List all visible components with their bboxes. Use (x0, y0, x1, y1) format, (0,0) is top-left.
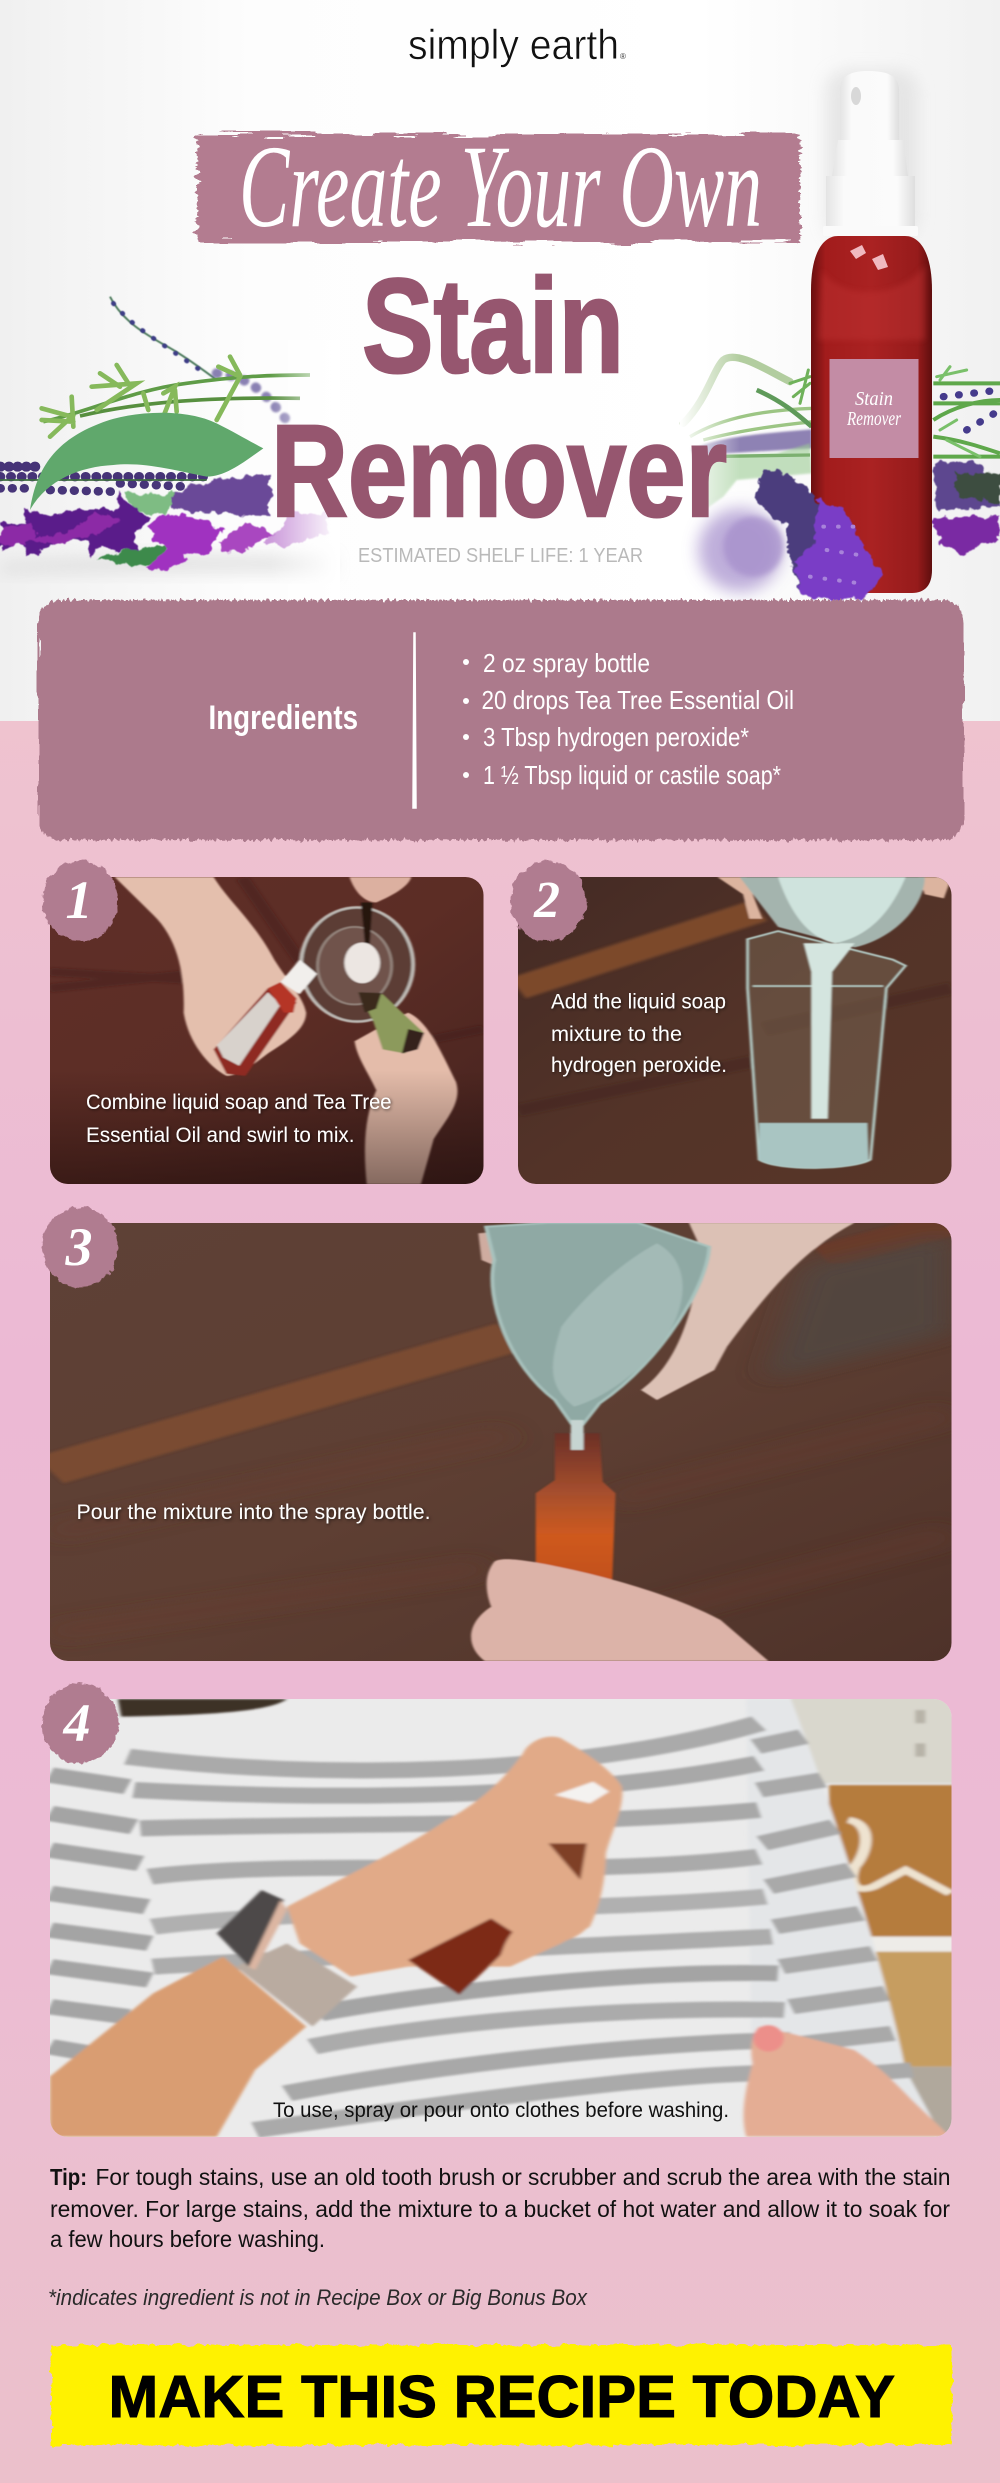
tip text: a few hours before washing. (50, 2226, 325, 2252)
panel: ingredients (38, 600, 964, 840)
hero: right botanical photo (683, 357, 1000, 555)
footnote: *indicates ingredient is not in Recipe Box or Big Bonus Box (48, 2285, 588, 2310)
call to action button: MAKE THIS RECIPE TODAY (108, 2364, 895, 2430)
tip text: For tough stains, use an old tooth brush or scrubber and scrub the area with the stain (96, 2164, 950, 2190)
brush stroke (197, 134, 800, 242)
panel: step 1 (42, 861, 484, 1184)
ingredient list: 1 ½ Tbsp liquid or castile soap* (483, 760, 781, 790)
ingredient list (463, 648, 794, 790)
step 3 photo (50, 1223, 952, 1661)
step 4 badge: 4 (62, 1693, 90, 1753)
step 3 badge: 3 (64, 1217, 92, 1277)
spray bottle (811, 70, 932, 593)
hero: right photo fade (680, 340, 740, 610)
bottle label: Remover (846, 408, 901, 430)
ingredients heading: Ingredients (208, 699, 358, 737)
bottle cap and nozzle (823, 71, 918, 236)
step 2 badge (510, 861, 586, 941)
panel: step 3 (42, 1207, 952, 1661)
step 1 badge (42, 861, 118, 941)
logo: ® (620, 52, 626, 61)
title: Stain: Stain (362, 252, 624, 401)
call to action button (51, 2345, 952, 2445)
step 2 photo (518, 877, 952, 1184)
step 1 photo (50, 877, 484, 1184)
step 2 caption: Add the liquid soap (551, 990, 726, 1014)
step 2 badge: 2 (533, 872, 560, 929)
divider (413, 633, 416, 808)
step 1 caption: Combine liquid soap and Tea Tree (86, 1091, 392, 1114)
step 3 caption: Pour the mixture into the spray bottle. (76, 1501, 430, 1524)
step 1 caption: Essential Oil and swirl to mix. (86, 1124, 354, 1147)
step 2 caption (551, 990, 727, 1077)
bottle label (830, 359, 918, 458)
heading banner: Create Your Own (197, 121, 800, 252)
bottle body (811, 236, 932, 593)
title: Remover: Remover (271, 397, 727, 544)
step 3 badge (42, 1207, 118, 1287)
shelf life note: ESTIMATED SHELF LIFE: 1 YEAR (358, 545, 643, 567)
bottle label: Stain (855, 388, 893, 410)
step 1 badge: 1 (66, 870, 92, 930)
ingredient list: 20 drops Tea Tree Essential Oil (482, 685, 794, 715)
panel: step 2 (510, 861, 952, 1184)
step 4 photo (50, 1697, 957, 2140)
step 1 caption (86, 1091, 392, 1147)
panel background (38, 600, 964, 840)
hero: left photo fade (270, 340, 340, 610)
step 2 caption: hydrogen peroxide. (551, 1054, 727, 1077)
cap shadow halo (826, 70, 918, 240)
tip text: Tip: (50, 2164, 87, 2190)
tip text: remover. For large stains, add the mixture to a bucket of hot water and allow it to soak for (50, 2196, 950, 2222)
step 4 caption: To use, spray or pour onto clothes before washing. (273, 2099, 729, 2122)
hero: left botanical photo (0, 297, 333, 573)
step 4 badge (42, 1683, 118, 1763)
ingredient list: 2 oz spray bottle (483, 648, 650, 678)
tip text (50, 2164, 950, 2252)
ingredient list: 3 Tbsp hydrogen peroxide* (483, 722, 749, 752)
logo: simply earth (408, 21, 619, 68)
lavender in front of bottle (698, 470, 883, 600)
panel: step 4 (42, 1683, 957, 2140)
step 2 caption: mixture to the (551, 1023, 682, 1046)
